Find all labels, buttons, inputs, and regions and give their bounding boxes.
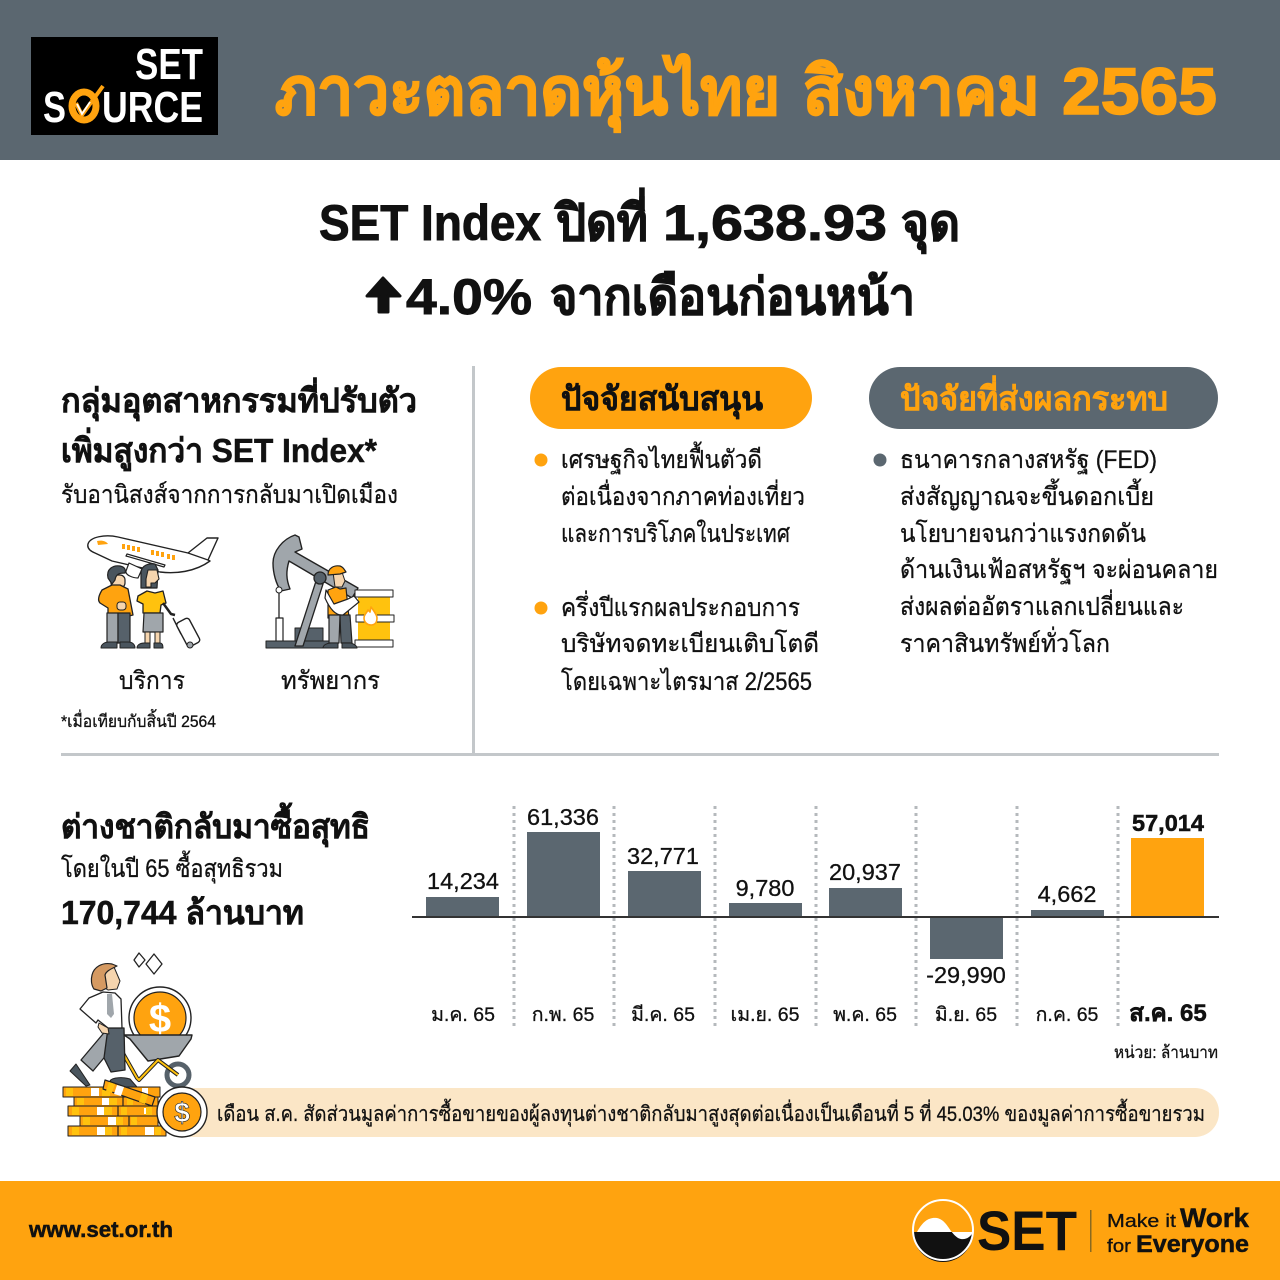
panel: foreign net buying summary [61, 802, 370, 931]
panel: foreign net buying summary: ต่างชาติกลับมาซื้อสุทธิ [61, 802, 370, 848]
bar chart: 32,771 [627, 843, 699, 869]
bar chart: ก.ค. 65 [1036, 1004, 1099, 1026]
icon: coin: $ [174, 1097, 190, 1128]
headline: SET Index: 1,638.93 [663, 195, 887, 251]
tilted coin [103, 1080, 155, 1106]
coin stack [63, 1087, 166, 1136]
bar chart: 20,937 [829, 859, 901, 885]
bar chart: 57,014 [1132, 810, 1204, 836]
headline: SET Index: จากเดือนก่อนหน้า [550, 269, 915, 325]
logo: SET SOURCE: S [43, 83, 66, 132]
panel: negative factors: นโยบายจนกว่าแรงกดดัน [900, 519, 1146, 548]
title: 2565 [1062, 54, 1217, 128]
tagline: Everyone [1136, 1231, 1249, 1258]
headline: SET Index: ปิดที่ [554, 188, 648, 251]
panel: supporting factors: และการบริโภคในประเทศ [561, 519, 790, 548]
icon: travellers and plane [88, 536, 218, 648]
vertical divider [472, 366, 475, 754]
bar chart: 9,780 [736, 875, 794, 901]
panel: supporting factors: ต่อเนื่องจากภาคท่องเที่ยว [561, 479, 805, 511]
headline: SET Index: SET Index [319, 195, 541, 251]
label: resources: ทรัพยากร [281, 667, 380, 695]
bar chart: เม.ย. 65 [731, 1004, 800, 1026]
title: สิงหาคม [803, 54, 1040, 128]
panel: supporting factors: เศรษฐกิจไทยฟื้นตัวดี [561, 441, 762, 474]
tagline: for [1107, 1236, 1131, 1256]
logo: SET SOURCE: URCE [102, 83, 203, 132]
headline: SET Index [319, 188, 960, 325]
wheelbarrow [124, 1035, 192, 1061]
big coin [129, 987, 191, 1049]
unit note: หน่วย: ล้านบาท [1114, 1043, 1218, 1062]
big coin: $ [149, 997, 171, 1041]
title: ภาวะตลาดหุ้นไทย [275, 53, 780, 133]
logo: SET SOURCE: SET [135, 40, 203, 89]
panel: negative factors: ปัจจัยที่ส่งผลกระทบ [900, 375, 1168, 417]
bar chart: 61,336 [527, 804, 599, 830]
tagline: Make it [1107, 1211, 1176, 1231]
panel: foreign net buying summary: โดยในปี 65 ซื้อสุทธิรวม [61, 850, 283, 884]
website: www.set.or.th [28, 1217, 173, 1242]
horizontal divider [61, 753, 1219, 756]
panel: outperforming sectors [61, 377, 417, 731]
tagline: Work [1180, 1203, 1250, 1233]
bar chart: ม.ค. 65 [431, 1004, 495, 1026]
panel: supporting factors: โดยเฉพาะไตรมาส 2/2565 [561, 667, 812, 696]
footnote: *เมื่อเทียบกับสิ้นปี 2564 [61, 709, 216, 731]
panel: supporting factors [530, 367, 819, 696]
logo: SET [913, 1199, 1077, 1262]
panel: outperforming sectors: รับอานิสงส์จากการกลับมาเปิดเมือง [61, 481, 398, 509]
headline: SET Index: จุด [901, 195, 960, 254]
icon: up arrow [367, 278, 400, 312]
footer band [0, 1181, 1280, 1280]
icon: coin [157, 1087, 207, 1137]
panel: negative factors: ส่งผลต่ออัตราแลกเปลี่ยนและ [900, 589, 1184, 621]
panel: supporting factors: ปัจจัยสนับสนุน [561, 380, 763, 420]
bar chart: มิ.ย. 65 [935, 1004, 997, 1026]
bar chart: -29,990 [926, 962, 1006, 988]
panel: foreign net buying summary: 170,744 ล้านบาท [61, 894, 304, 931]
bar chart: 14,234 [427, 868, 499, 894]
callout [157, 1087, 1219, 1137]
panel: outperforming sectors: เพิ่มสูงกว่า SET Index* [61, 427, 377, 472]
panel: outperforming sectors: กลุ่มอุตสาหกรรมที่ปรับตัว [61, 377, 417, 422]
shirt and head [80, 992, 122, 1028]
logo: SET: SET [977, 1199, 1077, 1262]
legs [81, 1028, 116, 1071]
sparkles [134, 953, 162, 974]
bar chart: 4,662 [1038, 881, 1096, 907]
bar chart [412, 804, 1219, 1062]
icon: oil pump and worker [266, 535, 394, 648]
tagline [1107, 1203, 1250, 1258]
panel: negative factors: ราคาสินทรัพย์ทั่วโลก [900, 626, 1110, 658]
panel: negative factors: ด้านเงินเฟ้อสหรัฐฯ จะผ่อนคลาย [900, 556, 1218, 584]
panel: supporting factors: บริษัทจดทะเบียนเติบโตดี [561, 629, 819, 658]
bar chart: พ.ค. 65 [833, 1004, 897, 1026]
panel: negative factors: ส่งสัญญาณจะขึ้นดอกเบี้ย [900, 478, 1154, 511]
header band [0, 0, 1280, 160]
logo: SET SOURCE [31, 37, 218, 135]
label: services: บริการ [119, 667, 185, 695]
panel: negative factors: ธนาคารกลางสหรัฐ (FED) [900, 446, 1157, 474]
headline: SET Index: 4.0% [406, 269, 532, 325]
bar chart: ส.ค. 65 [1129, 1000, 1207, 1027]
title [275, 53, 1217, 133]
bar chart: ก.พ. 65 [532, 1004, 594, 1026]
bar chart: มี.ค. 65 [631, 1004, 695, 1026]
icon: person with wheelbarrow on coins [63, 953, 192, 1136]
panel: supporting factors: ครึ่งปีแรกผลประกอบการ [561, 590, 800, 622]
panel: negative factors [869, 367, 1218, 658]
